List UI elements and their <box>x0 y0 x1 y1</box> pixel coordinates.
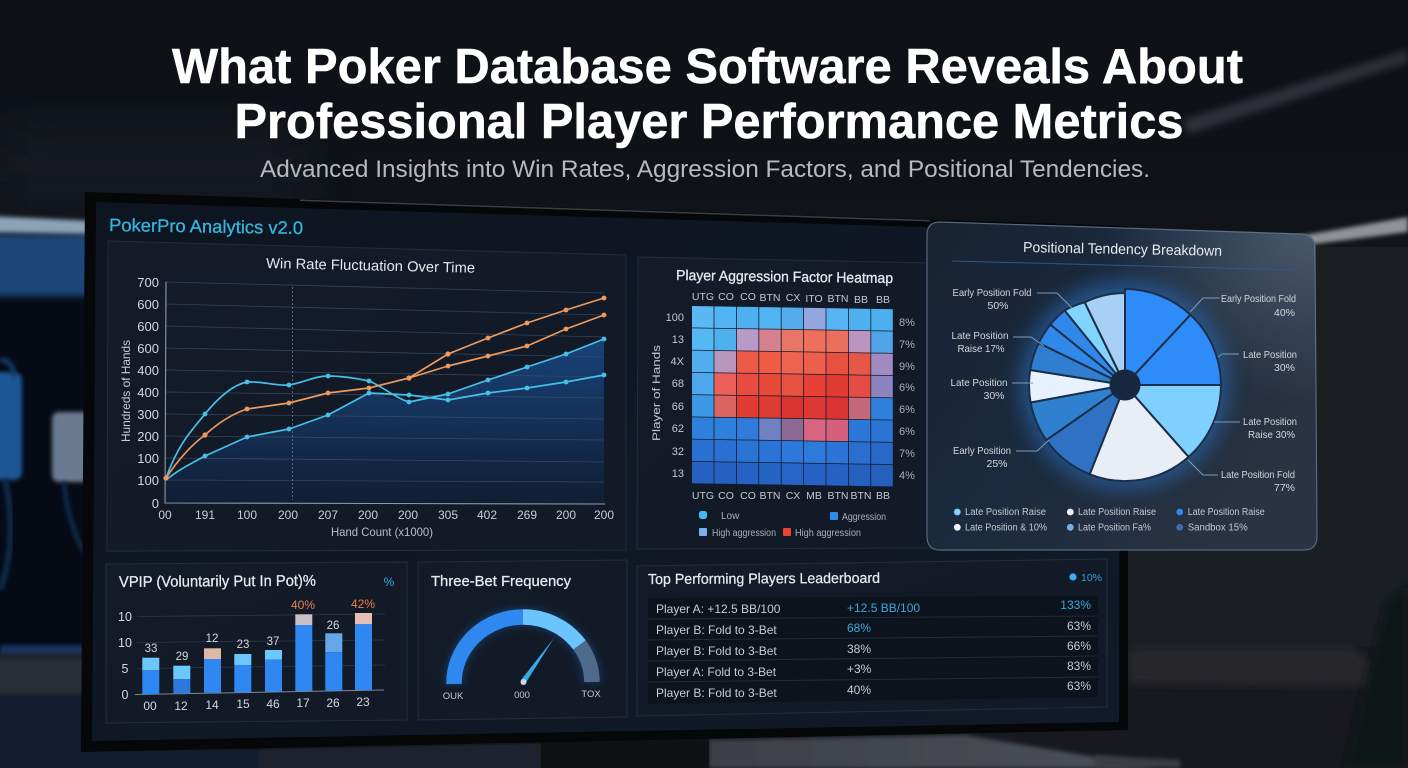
chart title: Win Rate Fluctuation Over Time <box>266 256 475 277</box>
row 5: Player B: Fold to 3-Bet <box>656 686 777 700</box>
y axis labels: 300 <box>137 407 159 422</box>
pie label left 4: 25% <box>986 458 1008 470</box>
VPIP x labels: 23 <box>356 695 370 709</box>
heatmap legend: High aggression <box>795 528 861 539</box>
gauge title: Three-Bet Frequency <box>431 573 571 590</box>
pie label left 1: Early Position Fold <box>952 287 1032 299</box>
panel: three-bet gauge <box>418 560 627 720</box>
VPIP y labels <box>118 610 132 702</box>
heatmap column labels bottom: BTN <box>760 490 780 502</box>
x axis labels: 200 <box>556 508 576 522</box>
title: What Poker Database Software Reveals About <box>172 40 1243 94</box>
heatmap column labels top: ITO <box>805 293 823 305</box>
panel: aggression heatmap <box>637 257 930 549</box>
VPIP bars <box>142 613 372 694</box>
pie label right 3 <box>1243 416 1297 441</box>
pie label right 3: Late Position <box>1243 416 1297 428</box>
row 4: Player A: Fold to 3-Bet <box>656 665 777 679</box>
pie label right 1: 40% <box>1274 307 1295 319</box>
VPIP y labels: 5 <box>122 662 129 676</box>
row 3: 38% <box>847 642 871 656</box>
row 3: Player B: Fold to 3-Bet <box>656 644 777 658</box>
gauge labels <box>443 689 601 702</box>
gauge labels: 000 <box>514 690 530 701</box>
x axis labels: 200 <box>278 508 298 522</box>
x axis labels: 207 <box>318 508 338 522</box>
line series: cyan lower <box>166 373 606 480</box>
pie label left 4: Early Position <box>953 445 1011 457</box>
row 5: 63% <box>1067 679 1091 693</box>
VPIP bar value labels: 42% <box>351 597 375 611</box>
gauge glow <box>454 617 592 684</box>
pie legend: Late Position Fa% <box>1078 522 1151 534</box>
heatmap right percent labels: 9% <box>899 361 915 373</box>
heatmap column labels top: CO <box>718 291 734 303</box>
heatmap right percent labels: 6% <box>899 382 915 394</box>
y axis labels: 0 <box>152 496 159 511</box>
row 1: 133% <box>1060 598 1091 612</box>
VPIP bar value labels <box>145 597 375 663</box>
x axis labels <box>158 508 614 522</box>
gauge labels: OUK <box>443 691 464 702</box>
VPIP x labels: 12 <box>174 699 188 713</box>
pie label right 2: 30% <box>1274 362 1295 374</box>
pie legend: Late Position Raise <box>965 507 1046 518</box>
pie label right 1: Early Position Fold <box>1221 293 1296 305</box>
app header: PokerPro Analytics v2.0 <box>109 215 303 238</box>
heatmap column labels top: UTG <box>692 291 714 303</box>
panel: leaderboard <box>637 559 1107 716</box>
heatmap right percent labels <box>899 317 915 482</box>
heatmap row labels: 100 <box>666 312 684 324</box>
pie label left 3: Late Position <box>950 377 1008 389</box>
pie label left 1: 50% <box>987 300 1009 312</box>
x axis labels: 200 <box>358 508 378 522</box>
heatmap title: Player Aggression Factor Heatmap <box>676 268 893 287</box>
heatmap y title: Player of Hands <box>651 344 663 441</box>
pie label right 4: Late Position Fold <box>1221 469 1295 481</box>
pie label right 2: Late Position <box>1243 349 1297 361</box>
y axis labels: 700 <box>137 275 159 290</box>
pie legend: Late Position Raise <box>1188 507 1265 518</box>
title <box>172 40 1243 149</box>
panel: VPIP bar chart <box>106 562 407 723</box>
pie label right 1 <box>1221 293 1296 319</box>
y axis labels: 400 <box>137 363 159 378</box>
panel: win rate line chart <box>107 241 626 551</box>
y axis title: Hundreds of Hands <box>119 340 133 442</box>
y axis labels <box>137 275 159 511</box>
VPIP y labels: 10 <box>118 636 132 650</box>
pie chart <box>1029 289 1221 481</box>
area fill <box>166 339 604 504</box>
pie label left 2: Raise 17% <box>958 343 1004 355</box>
row 4: +3% <box>847 662 872 676</box>
VPIP bar value labels: 12 <box>206 633 218 645</box>
row 1 <box>656 598 1091 616</box>
leaderboard table <box>648 596 1098 704</box>
VPIP bar value labels: 33 <box>145 643 157 655</box>
x axis labels: 305 <box>438 508 458 522</box>
heatmap column labels bottom: MB <box>806 490 822 502</box>
heatmap row labels <box>666 312 685 480</box>
y axis labels: 100 <box>137 451 159 466</box>
card title: Positional Tendency Breakdown <box>1023 240 1222 260</box>
VPIP x labels: 17 <box>296 696 310 710</box>
VPIP bar value labels: 37 <box>267 636 279 648</box>
VPIP y labels: 0 <box>122 688 129 702</box>
row 3 <box>656 639 1091 658</box>
panel: positional tendency glass card <box>927 222 1317 550</box>
pie legend: Late Position Raise <box>1078 507 1156 518</box>
gauge needle <box>521 638 554 684</box>
heatmap column labels top: BB <box>876 294 890 306</box>
heatmap column labels bottom: CO <box>740 490 756 502</box>
pie legend: Sandbox 15% <box>1188 522 1248 534</box>
y axis labels: 200 <box>137 429 159 444</box>
heatmap row labels: 66 <box>672 401 684 413</box>
leaderboard legend <box>1069 572 1102 584</box>
gauge labels: TOX <box>581 689 601 700</box>
x axis labels: 269 <box>517 508 537 522</box>
pie label left 1 <box>952 287 1032 312</box>
pie label left 2: Late Position <box>952 330 1009 342</box>
heatmap row labels: 68 <box>672 378 684 390</box>
row 3: 66% <box>1067 639 1091 653</box>
VPIP y labels: 10 <box>118 610 132 624</box>
pie label right 4 <box>1221 469 1295 494</box>
VPIP bar value labels: 29 <box>176 651 188 663</box>
pie label left 4 <box>953 445 1011 470</box>
pie label left 3: 30% <box>983 390 1005 402</box>
row 2: 68% <box>847 621 871 635</box>
x axis title: Hand Count (x1000) <box>331 525 433 539</box>
x axis labels: 200 <box>594 508 614 522</box>
pie label right 3: Raise 30% <box>1248 429 1295 441</box>
VPIP x labels <box>143 695 370 713</box>
heatmap right percent labels: 4% <box>899 470 915 482</box>
VPIP bar value labels: 26 <box>327 620 339 632</box>
monitor stand <box>541 738 709 768</box>
heatmap legend: Low <box>721 511 740 522</box>
pie label right 2 <box>1243 349 1297 374</box>
pie leader lines <box>1012 293 1240 475</box>
pie legend: Late Position & 10% <box>965 522 1047 534</box>
heatmap column labels top: BTN <box>828 293 848 305</box>
heatmap legend <box>699 511 886 539</box>
heatmap right percent labels: 7% <box>899 339 915 351</box>
row 4 <box>656 659 1091 679</box>
heatmap right percent labels: 7% <box>899 448 915 460</box>
y axis labels: 600 <box>137 319 159 334</box>
y axis labels: 600 <box>137 341 159 356</box>
heatmap column labels bottom <box>692 490 890 502</box>
row 1: Player A: +12.5 BB/100 <box>656 602 781 616</box>
subtitle: Advanced Insights into Win Rates, Aggression Factors, and Positional Tendencies. <box>260 156 1150 183</box>
heatmap column labels bottom: BTN <box>850 490 872 502</box>
heatmap column labels bottom: CO <box>718 490 734 502</box>
heatmap column labels top: CX <box>786 292 800 304</box>
pie label left 2 <box>952 330 1009 355</box>
line series: orange lower <box>409 313 606 378</box>
x axis labels: 402 <box>477 508 497 522</box>
pie label right 4: 77% <box>1274 482 1295 494</box>
x axis labels: 00 <box>158 508 172 522</box>
heatmap column labels bottom: UTG <box>692 490 714 502</box>
x axis labels: 191 <box>195 508 215 522</box>
heatmap row labels: 13 <box>672 334 684 346</box>
leaderboard title: Top Performing Players Leaderboard <box>648 571 880 588</box>
title: Professional Player Performance Metrics <box>234 95 1184 149</box>
heatmap grid <box>692 306 893 486</box>
heatmap row labels: 62 <box>672 423 684 435</box>
row 2: 63% <box>1067 619 1091 633</box>
y axis labels: 400 <box>137 385 159 400</box>
heatmap row labels: 32 <box>672 446 684 458</box>
VPIP bar value labels: 23 <box>237 639 249 651</box>
VPIP x labels: 26 <box>326 696 340 710</box>
heatmap column labels top <box>692 291 890 306</box>
x axis labels: 100 <box>237 508 257 522</box>
heatmap right percent labels: 6% <box>899 426 915 438</box>
heatmap column labels top: CO <box>740 291 756 303</box>
heatmap right percent labels: 6% <box>899 404 915 416</box>
heatmap column labels bottom: CX <box>786 490 800 502</box>
pie glow <box>1021 281 1229 489</box>
row 5: 40% <box>847 683 871 697</box>
row 5 <box>656 679 1091 700</box>
VPIP percent marker: % <box>384 575 395 589</box>
row 2 <box>656 619 1091 637</box>
heatmap column labels top: BB <box>854 294 868 306</box>
VPIP x labels: 14 <box>205 698 219 712</box>
heatmap column labels bottom: BTN <box>828 490 848 502</box>
x axis labels: 200 <box>398 508 418 522</box>
VPIP title: VPIP (Voluntarily Put In Pot)% <box>119 573 316 591</box>
pie legend <box>954 507 1265 534</box>
heatmap legend: High aggression <box>712 528 776 539</box>
VPIP x labels: 15 <box>236 697 250 711</box>
pie label left 3 <box>950 377 1008 402</box>
line series: cyan upper <box>166 337 606 478</box>
heatmap column labels top: BTN <box>760 292 780 304</box>
y axis labels: 600 <box>137 297 159 312</box>
heatmap row labels: 13 <box>672 468 684 480</box>
y axis labels: 100 <box>137 473 159 488</box>
VPIP bar value labels: 40% <box>291 598 315 612</box>
line series: orange upper <box>163 296 606 481</box>
row 1: +12.5 BB/100 <box>847 601 920 615</box>
VPIP x labels: 00 <box>143 699 157 713</box>
row 4: 83% <box>1067 659 1091 673</box>
VPIP x labels: 46 <box>266 697 280 711</box>
gauge hub <box>520 679 526 685</box>
heatmap right percent labels: 8% <box>899 317 915 329</box>
leaderboard legend: 10% <box>1081 572 1102 584</box>
heatmap column labels bottom: BB <box>876 490 890 502</box>
gauge arcs <box>454 617 592 684</box>
heatmap legend: Aggression <box>842 512 886 523</box>
heatmap row labels: 4X <box>671 356 685 368</box>
monitor <box>81 192 1128 752</box>
row 2: Player B: Fold to 3-Bet <box>656 623 777 637</box>
